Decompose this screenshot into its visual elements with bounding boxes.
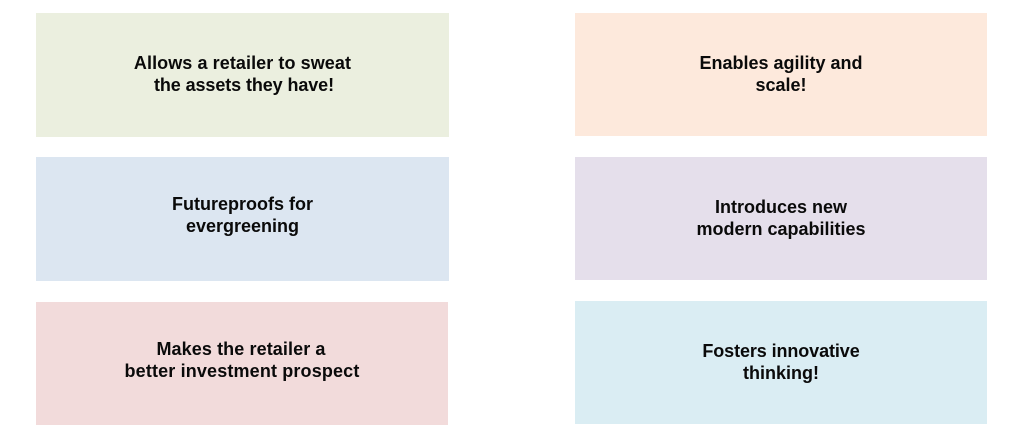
- text: innovative thinking: Fosters innovative: [702, 341, 860, 361]
- text: sweat the assets: [134, 53, 351, 95]
- text: futureproofs: [172, 194, 313, 236]
- panel: innovative thinking: [575, 301, 987, 424]
- text: agility and scale: Enables agility and: [699, 53, 863, 73]
- text: modern capabilities: modern capabilities: [696, 219, 866, 239]
- text: sweat the assets: the assets they have!: [154, 75, 334, 95]
- panel: modern capabilities: [575, 157, 987, 280]
- text: investment prospect: better investment prospect: [125, 361, 359, 381]
- panel: futureproofs: [36, 157, 449, 281]
- text: innovative thinking: thinking!: [743, 363, 819, 383]
- text: investment prospect: Makes the retailer a: [156, 339, 326, 359]
- text: sweat the assets: Allows a retailer to sweat: [134, 53, 351, 73]
- panel: agility and scale: [575, 13, 987, 136]
- panel: sweat the assets: [36, 13, 449, 137]
- text: investment prospect: [125, 339, 360, 381]
- text: agility and scale: scale!: [755, 75, 807, 95]
- text: futureproofs: Futureproofs for: [172, 194, 313, 214]
- panel: investment prospect: [36, 302, 448, 425]
- text: innovative thinking: [702, 341, 860, 383]
- text: agility and scale: [699, 53, 863, 95]
- text: futureproofs: evergreening: [186, 216, 299, 236]
- text: modern capabilities: Introduces new: [715, 197, 847, 217]
- text: modern capabilities: [696, 197, 866, 239]
